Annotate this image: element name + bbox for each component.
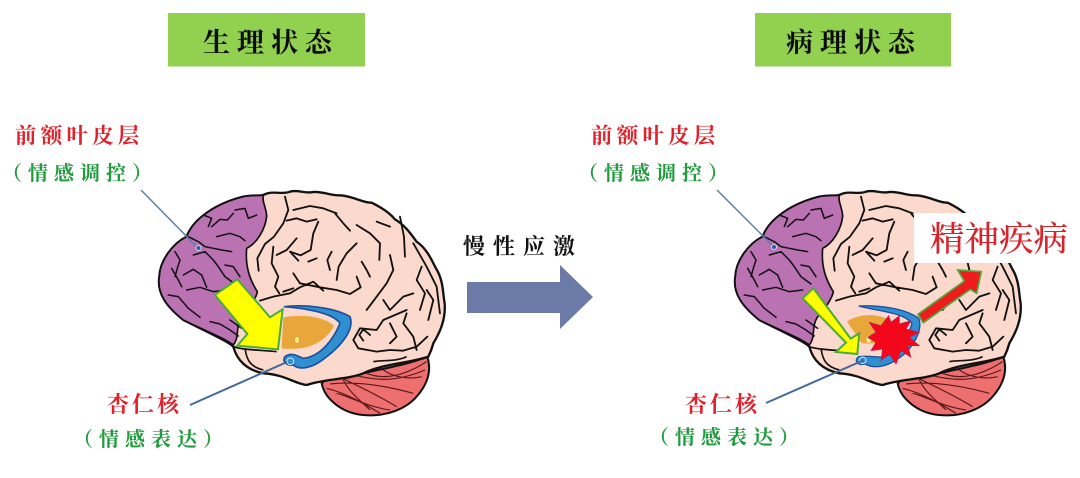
heading: 病理状态 <box>755 13 951 66</box>
callout box: 精神疾病 <box>914 213 1074 263</box>
label: 慢性应激: 慢性应激 <box>463 234 583 259</box>
label: 前额叶皮层 right: 前额叶皮层 <box>591 124 720 148</box>
heading: 生理状态: 生理状态 <box>203 27 339 58</box>
arrow: chronic stress <box>467 265 593 329</box>
heading: 病理状态: 病理状态 <box>786 27 922 58</box>
leader line: prefrontal left <box>141 190 201 250</box>
arrow: yellow prefrontal to amygdala <box>215 279 283 349</box>
arrow: red to psychiatric disease <box>918 270 981 323</box>
heading: 生理状态 <box>168 13 365 66</box>
label: 情感表达 right: （情感表达） <box>649 425 805 449</box>
label: 杏仁核 left: 杏仁核 <box>107 392 182 417</box>
label: 杏仁核 right: 杏仁核 <box>685 392 760 417</box>
label: 前额叶皮层 left: 前额叶皮层 <box>15 124 144 148</box>
leader line: amygdala left <box>190 362 287 405</box>
starburst: red lesion <box>868 316 919 364</box>
label: 情感调控 left: （情感调控） <box>2 161 158 185</box>
leader line: prefrontal right <box>717 190 776 250</box>
arrow: yellow thin <box>803 288 859 354</box>
leader line: amygdala right <box>766 360 864 403</box>
brain: pathological state <box>735 191 1021 415</box>
amygdala and hippocampus <box>847 306 920 367</box>
label: 情感调控 right: （情感调控） <box>578 161 734 185</box>
brain: physiological state <box>159 191 445 415</box>
amygdala and hippocampus <box>282 306 351 368</box>
callout box: 精神疾病: 精神疾病 <box>930 221 1068 259</box>
label: 情感表达 left: （情感表达） <box>73 427 229 451</box>
